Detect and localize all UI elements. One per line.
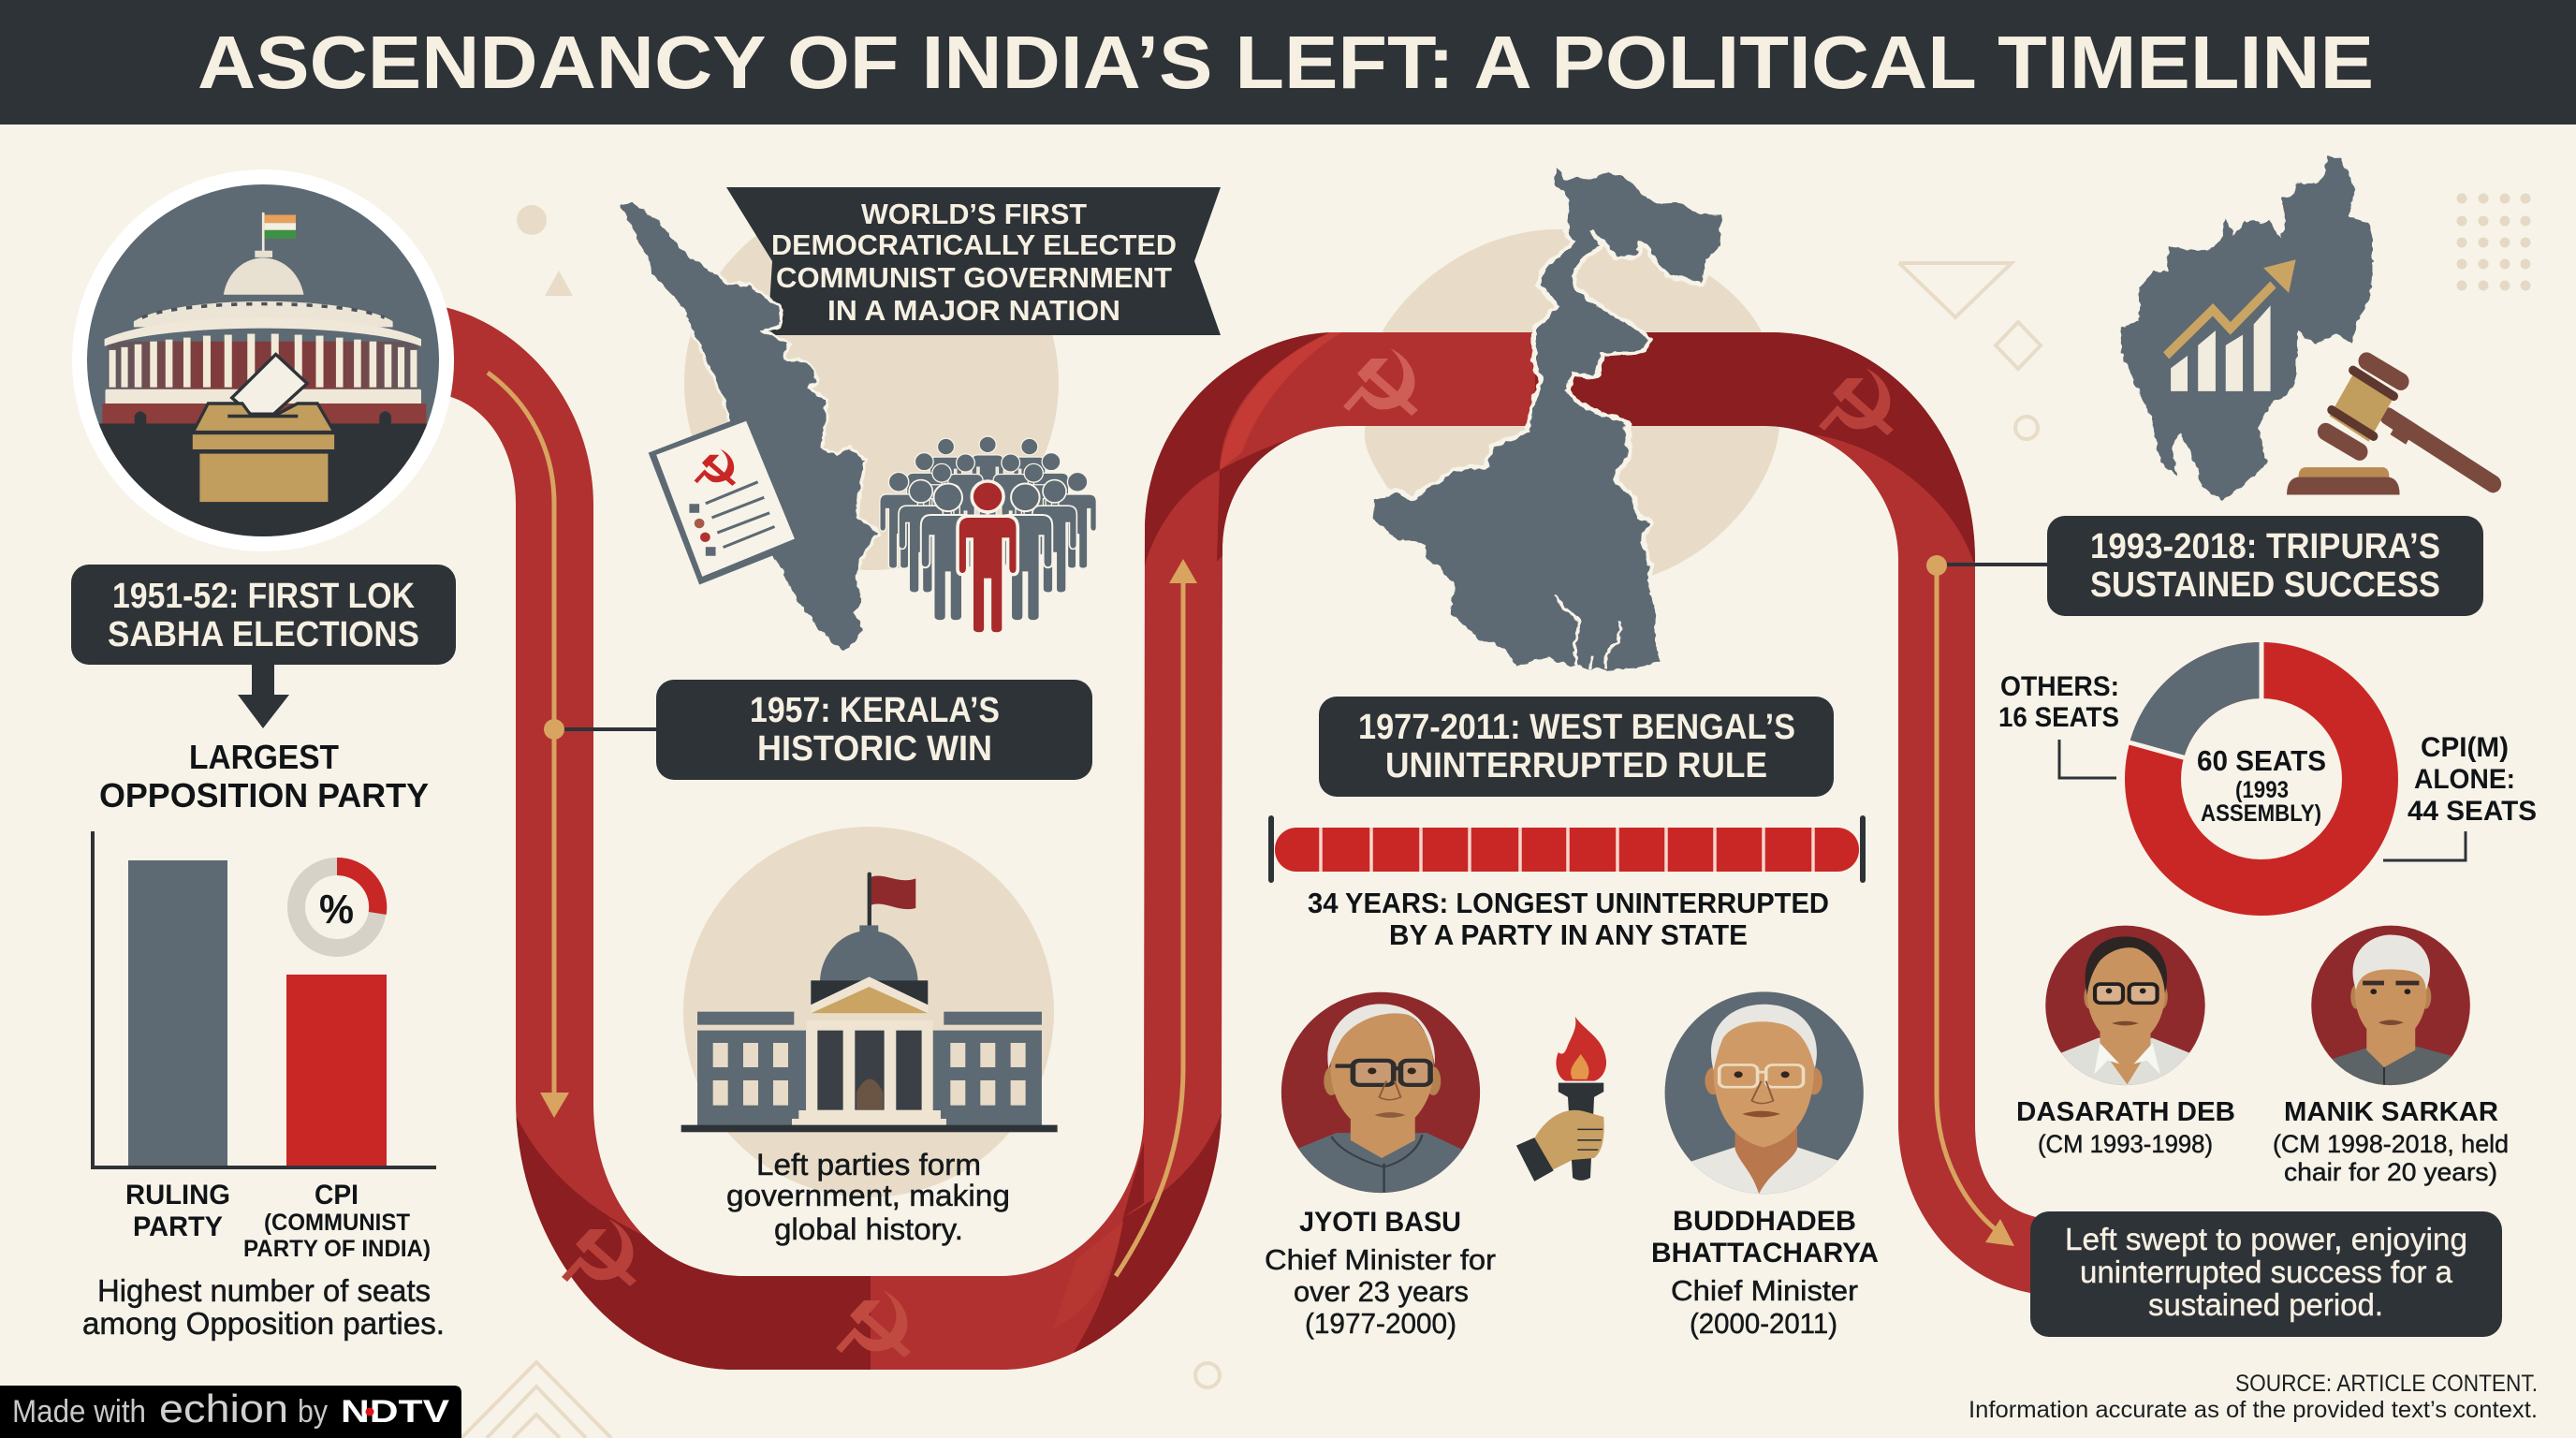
icon: torch in hand <box>1516 1017 1606 1181</box>
heading pill: 1977-2011: UNINTERRUPTED RULE <box>1385 746 1767 785</box>
donut chart: 60 seats: ASSEMBLY) <box>2201 800 2321 827</box>
donut label: others: OTHERS: <box>2000 671 2119 702</box>
gold arrow: first ribbon segment <box>488 373 569 1118</box>
bar label: ruling party <box>125 1180 230 1242</box>
banner: world's first <box>726 187 1221 335</box>
heading pill: 1957 <box>656 680 1092 780</box>
text: Buddhadeb Bhattacharya: BUDDHADEB <box>1673 1206 1856 1237</box>
gold arrow: rising ribbon segment <box>1116 559 1197 1276</box>
decorative background shapes <box>461 193 2531 1438</box>
heading pill: 1951-52 <box>71 565 456 665</box>
icon: percentage donut: % <box>319 887 354 932</box>
subheading: largest opposition party <box>99 738 429 814</box>
donut chart: 60 seats: 60 SEATS <box>2197 744 2326 777</box>
icon: parliament and ballot box <box>72 169 454 551</box>
banner: world's first: WORLD’S FIRST <box>861 198 1087 230</box>
icon: growth chart on Tripura <box>2166 259 2296 391</box>
subheading: largest opposition party: LARGEST <box>189 738 339 776</box>
caption: 34 years longest uninterrupted <box>1308 887 1829 951</box>
source note: SOURCE: ARTICLE CONTENT. <box>2235 1371 2538 1397</box>
footer badge: made with echion by NDTV: echion <box>159 1387 288 1431</box>
bar label: ruling party: PARTY <box>133 1211 223 1242</box>
text: Manik Sarkar: MANIK SARKAR <box>2284 1097 2498 1127</box>
donut label: CPI(M) <box>2383 732 2537 860</box>
text: Buddhadeb Bhattacharya: Chief Minister <box>1671 1274 1858 1307</box>
footer badge: made with echion by NDTV: Made with <box>12 1394 146 1430</box>
beige disc behind Kerala <box>684 196 1059 570</box>
caption: left parties form government: global history. <box>774 1212 963 1246</box>
bar label: CPI <box>243 1180 431 1262</box>
header bar <box>0 0 2576 125</box>
icon: manifesto document <box>649 414 802 585</box>
bar label: ruling party: RULING <box>125 1180 230 1211</box>
donut label: CPI(M): ALONE: <box>2414 764 2515 795</box>
banner: world's first: COMMUNIST GOVERNMENT <box>776 261 1172 294</box>
text: Jyoti Basu: Chief Minister for <box>1265 1243 1496 1276</box>
bar label: CPI: (COMMUNIST <box>264 1210 410 1236</box>
callout: left swept to power: Left swept to power, enjoying <box>2065 1222 2467 1256</box>
donut label: CPI(M): CPI(M) <box>2421 732 2509 763</box>
gold arrow: final ribbon segment <box>1937 565 2014 1246</box>
portrait: Jyoti Basu <box>1274 992 1485 1196</box>
caption: highest number of seats <box>82 1273 445 1341</box>
callout: left swept to power: uninterrupted success for a <box>2080 1255 2453 1289</box>
portrait: Buddhadeb Bhattacharya <box>1665 991 1864 1196</box>
heading pill: 1993-2018: SUSTAINED SUCCESS <box>2090 565 2440 605</box>
banner: world's first: IN A MAJOR NATION <box>827 294 1120 327</box>
text: Jyoti Basu: JYOTI BASU <box>1299 1207 1461 1238</box>
source note: Information accurate as of the provided text’s context. <box>1969 1397 2538 1423</box>
donut chart: 60 seats <box>2126 639 2370 888</box>
text: Dasarath Deb: DASARATH DEB <box>2016 1097 2235 1127</box>
beige disc behind government building <box>683 827 1054 1197</box>
donut label: others: 16 SEATS <box>1998 702 2119 733</box>
text: Buddhadeb Bhattacharya: BHATTACHARYA <box>1651 1238 1879 1269</box>
caption: highest number of seats: Highest number of seats <box>97 1273 431 1308</box>
bar label: CPI: PARTY OF INDIA) <box>243 1236 431 1262</box>
map: West Bengal <box>1371 169 1721 670</box>
heading pill: 1993-2018 <box>2047 516 2483 616</box>
timeline ribbon <box>431 304 2036 1386</box>
heading pill: 1951-52: SABHA ELECTIONS <box>108 615 419 654</box>
text: Manik Sarkar: chair for 20 years) <box>2284 1158 2497 1186</box>
text: Jyoti Basu: over 23 years <box>1294 1275 1469 1308</box>
heading pill: 1977-2011 <box>1319 697 1834 797</box>
heading pill: 1957: 1957: KERALA’S <box>750 691 1000 730</box>
donut label: CPI(M): 44 SEATS <box>2408 796 2537 827</box>
text: Manik Sarkar <box>2273 1097 2509 1186</box>
callout: left swept to power <box>2030 1211 2502 1337</box>
text: Dasarath Deb <box>2016 1097 2235 1158</box>
caption: left parties form government: government, making <box>726 1179 1010 1212</box>
source note <box>1969 1371 2538 1423</box>
heading pill: 1957: HISTORIC WIN <box>757 729 992 769</box>
bar label: CPI: CPI <box>315 1180 359 1211</box>
banner: world's first: DEMOCRATICALLY ELECTED <box>771 228 1177 261</box>
text: Manik Sarkar: (CM 1998-2018, held <box>2273 1130 2509 1158</box>
icon: crowd with red leader <box>880 436 1096 634</box>
bar chart: ruling party vs CPI <box>93 831 436 1167</box>
text: Buddhadeb Bhattacharya <box>1651 1206 1879 1340</box>
caption: highest number of seats: among Opposition parties. <box>82 1306 445 1341</box>
map: Kerala <box>621 203 877 651</box>
portrait: Manik Sarkar <box>2311 926 2470 1092</box>
beige disc behind West Bengal <box>1365 229 1779 576</box>
connector: 1993 marker <box>1926 555 2048 576</box>
title: ASCENDANCY OF INDIA’S LEFT: A POLITICAL TIMELINE <box>198 21 2374 104</box>
caption: 34 years longest uninterrupted: BY A PARTY IN ANY STATE <box>1389 918 1748 951</box>
donut label: others <box>1998 671 2119 778</box>
text: Buddhadeb Bhattacharya: (2000-2011) <box>1690 1307 1837 1340</box>
heading pill: 1977-2011: 1977-2011: WEST BENGAL’S <box>1358 708 1795 747</box>
footer badge: made with echion by NDTV <box>0 1386 461 1438</box>
caption: left parties form government: Left parties form <box>756 1148 981 1181</box>
caption: left parties form government <box>726 1148 1010 1246</box>
footer badge: made with echion by NDTV: NDTV <box>341 1394 449 1430</box>
text: Dasarath Deb: (CM 1993-1998) <box>2038 1130 2213 1158</box>
text: Jyoti Basu <box>1265 1207 1496 1340</box>
icon: government building <box>681 873 1058 1132</box>
timeline bar: 34 years <box>1268 815 1866 883</box>
donut chart: 60 seats: (1993 <box>2235 777 2289 803</box>
heading pill: 1951-52: 1951-52: FIRST LOK <box>112 577 415 616</box>
caption: 34 years longest uninterrupted: 34 YEARS: LONGEST UNINTERRUPTED <box>1308 887 1829 919</box>
footer badge: made with echion by NDTV: by <box>298 1394 328 1430</box>
portrait: Dasarath Deb <box>2045 926 2205 1092</box>
map: Tripura <box>2121 155 2373 500</box>
arrow down <box>238 665 289 728</box>
subheading: largest opposition party: OPPOSITION PARTY <box>99 776 429 814</box>
text: Jyoti Basu: (1977-2000) <box>1305 1307 1456 1340</box>
icon: gavel <box>2287 361 2493 495</box>
heading pill: 1993-2018: 1993-2018: TRIPURA’S <box>2090 527 2440 566</box>
icon: percentage donut <box>296 858 387 947</box>
callout: left swept to power: sustained period. <box>2148 1287 2383 1322</box>
connector: 1957 marker <box>544 719 657 740</box>
